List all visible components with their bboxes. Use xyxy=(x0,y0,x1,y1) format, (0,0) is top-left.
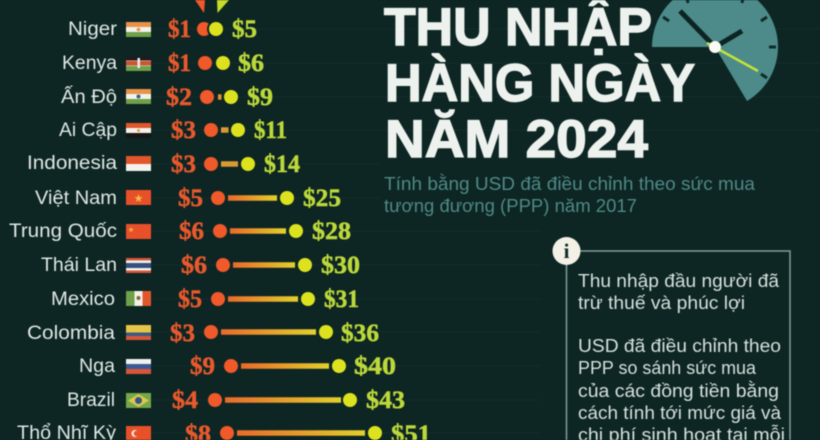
flag: India xyxy=(126,89,151,104)
row: Mexico xyxy=(51,286,359,313)
row: Brazil: $43 xyxy=(366,387,405,414)
row: Ấn Độ: $9 xyxy=(247,84,273,111)
row: Việt Nam: $5 xyxy=(178,185,203,212)
row: Nga: Nga xyxy=(79,356,115,377)
row: Colombia: $36 xyxy=(341,320,379,347)
row: Việt Nam: $25 xyxy=(303,185,341,212)
flag: Vietnam: ★ xyxy=(134,192,144,205)
row: Colombia: $3 xyxy=(170,320,195,347)
flag: China: ★ xyxy=(128,226,134,234)
flag: Egypt xyxy=(126,123,151,138)
row: Việt Nam: Việt Nam xyxy=(35,188,117,209)
row: Kenya: $1 xyxy=(168,50,191,77)
row: Ấn Độ: $2 xyxy=(166,84,192,111)
row: Trung Quốc xyxy=(9,218,351,245)
row: Mexico: Mexico xyxy=(51,289,115,310)
row: Ai Cập: $11 xyxy=(254,117,287,144)
row: Niger xyxy=(68,16,257,43)
flag: Mexico xyxy=(126,291,151,306)
row: Ai Cập xyxy=(59,117,287,144)
row: Ai Cập: $3 xyxy=(171,117,196,144)
row: Trung Quốc: $6 xyxy=(179,218,204,245)
title: HÀNG NGÀY xyxy=(385,54,695,113)
pointer triangles xyxy=(195,0,229,13)
note text xyxy=(578,271,785,440)
flag: Indonesia xyxy=(126,156,151,171)
icon: info: i xyxy=(564,239,570,263)
row: Brazil xyxy=(67,387,405,414)
flag: Thailand xyxy=(126,258,151,273)
row: Thổ Nhĩ Kỳ xyxy=(17,421,431,440)
note text: USD đã điều chỉnh theo xyxy=(578,336,781,356)
row: Kenya: $6 xyxy=(238,50,264,77)
row: Indonesia: $3 xyxy=(171,151,196,178)
row: Colombia xyxy=(27,320,379,347)
flag: Kenya xyxy=(126,56,151,71)
row: Trung Quốc: $28 xyxy=(312,218,351,245)
row: Ấn Độ: Ấn Độ xyxy=(61,86,117,108)
icon: info xyxy=(552,237,580,265)
note text: trừ thuế và phúc lợi xyxy=(578,293,745,313)
row: Nga xyxy=(79,353,396,380)
row: Indonesia xyxy=(27,151,300,178)
row: Nga: $40 xyxy=(354,353,396,380)
row: Trung Quốc: Trung Quốc xyxy=(9,221,117,242)
row: Kenya xyxy=(62,50,264,77)
note text: cách tính tới mức giá và xyxy=(578,403,782,423)
row: Việt Nam xyxy=(35,185,341,212)
row: Niger: $1 xyxy=(168,16,191,43)
note text: PPP so sánh sức mua xyxy=(578,358,757,378)
subtitle: Tính bằng USD đã điều chỉnh theo sức mua xyxy=(384,173,756,194)
row: Mexico: $5 xyxy=(178,286,202,313)
subtitle xyxy=(384,173,756,216)
subtitle: tương đương (PPP) năm 2017 xyxy=(384,196,637,216)
row: Mexico: $31 xyxy=(324,286,359,313)
title: NĂM 2024 xyxy=(385,110,648,169)
icon: clock xyxy=(652,0,778,101)
row: Thái Lan: $6 xyxy=(181,252,207,279)
row: Kenya: Kenya xyxy=(62,53,117,74)
row: Niger: $5 xyxy=(232,16,257,43)
row: Ai Cập: Ai Cập xyxy=(59,120,117,141)
row: Indonesia: $14 xyxy=(264,151,300,178)
row: Nga: $9 xyxy=(190,353,215,380)
flag: Colombia xyxy=(126,325,151,340)
flag: Brazil xyxy=(126,393,151,408)
flag: Turkey xyxy=(126,426,151,440)
row: Indonesia: Indonesia xyxy=(27,153,117,174)
flag: Vietnam xyxy=(126,190,151,205)
panel: info note xyxy=(552,237,790,440)
row: Niger: Niger xyxy=(68,19,118,40)
note text: của các đồng tiền bằng xyxy=(578,380,779,401)
row: Thái Lan xyxy=(41,252,360,279)
row: Ấn Độ xyxy=(61,84,273,111)
row: Colombia: Colombia xyxy=(27,323,115,344)
flag: Niger xyxy=(126,22,151,37)
row: Thái Lan: Thái Lan xyxy=(41,255,117,276)
note text: Thu nhập đầu người đã xyxy=(578,271,780,291)
flag: China xyxy=(126,224,151,239)
title xyxy=(384,0,695,169)
row: Thái Lan: $30 xyxy=(321,252,360,279)
flag: Russia xyxy=(126,359,151,374)
row: Brazil: Brazil xyxy=(67,390,115,411)
row: Brazil: $4 xyxy=(172,387,199,414)
